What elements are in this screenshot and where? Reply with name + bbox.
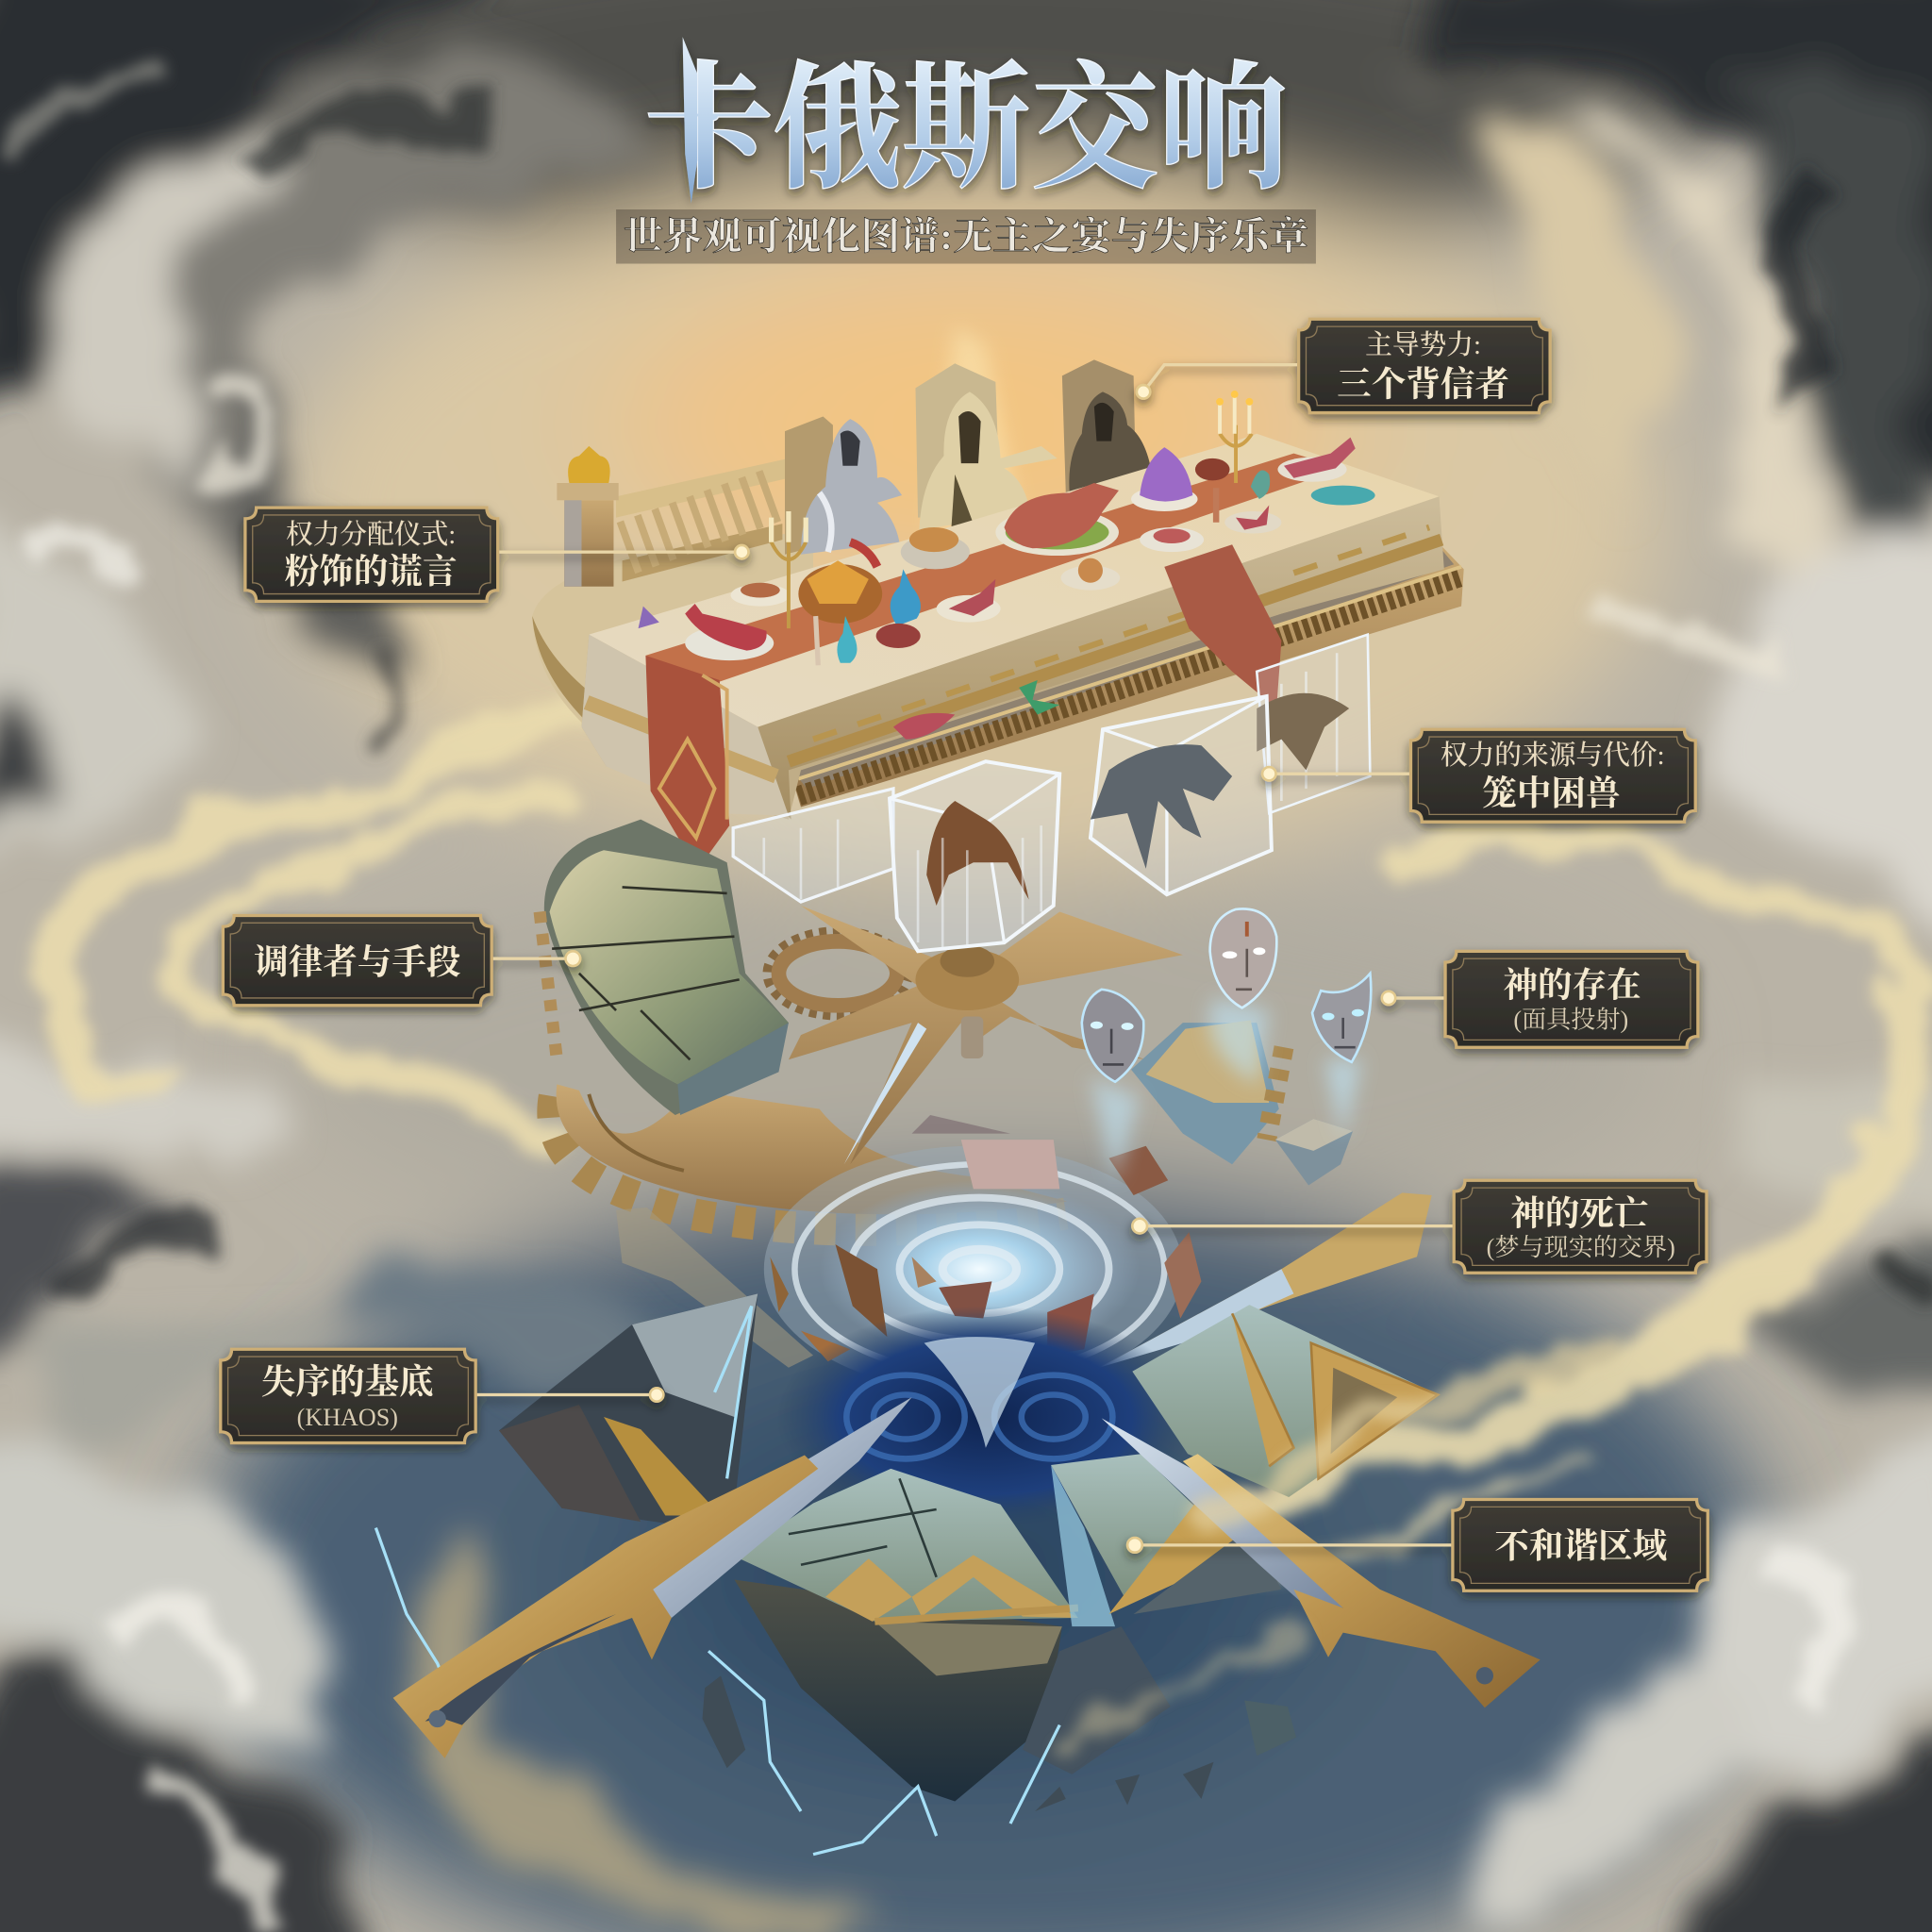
figure: pale hooded traitor [785,416,902,555]
crossed ornate daggers [393,1397,1541,1758]
figure: dark hooded traitor [1062,359,1152,492]
icon: golden crown finial [557,446,619,587]
dish: roast turkey [995,483,1119,556]
callout: caged beasts: 笼中困兽 [1482,774,1621,812]
callout: death of god: 神的死亡 [1510,1193,1649,1232]
callout: dominant powers: 三个背信者 [1337,364,1509,403]
callout: tuner and means [223,915,580,1006]
subtitle band: 世界观可视化图谱:无主之宴与失序乐章 [624,215,1308,258]
decanter blue [891,569,921,626]
callout: death of god [1132,1180,1707,1273]
candelabrum right [1216,391,1253,483]
three traitor figures on thrones [785,326,1152,555]
candelabrum left [772,511,806,628]
figure: golden hooded traitor with light beam [915,326,1058,530]
central cracked stone with gold inlay [734,1469,1078,1622]
orange table runner [645,454,1343,870]
callout: existence of god [1382,951,1698,1047]
left cliff fragment [499,1293,758,1524]
dish: purple crystal [1131,447,1198,511]
cage: far right with brown beast [1257,635,1370,813]
callout: power ritual [245,508,748,601]
callout: base of chaos [221,1349,663,1442]
mask: top [1209,908,1276,1084]
shattered ground: the disharmony zone [375,1293,1438,1855]
feast dishes [639,391,1375,740]
dagger right [1102,1418,1541,1707]
banquet table [581,391,1464,870]
callout: power ritual: 权力分配仪式: [286,520,456,550]
mask: left [1082,990,1143,1183]
callout: death of god: (梦与现实的交界) [1487,1234,1675,1261]
table cloth [581,434,1444,820]
blue abyss whirlpool [776,1306,1195,1528]
golden mist crossing the right stones [1059,1343,1602,1750]
callout: power ritual: 粉饰的谎言 [285,552,458,591]
callout: tuner and means: 调律者与手段 [254,942,460,981]
table wooden base with shelf [789,540,1464,808]
dagger left [393,1397,912,1758]
masks of the gods [1082,908,1371,1183]
rear right stone with gold trim [1132,1305,1438,1497]
title: 卡俄斯交响 [644,54,1288,207]
decanter teal [837,616,857,663]
dream vortex with torn pages [764,1115,1201,1392]
callout: dominant powers: 主导势力: [1365,330,1481,360]
callout: base of chaos: 失序的基底 [261,1362,434,1401]
callout: base of chaos: (KHAOS) [297,1404,398,1431]
cracked stone slab (left) [540,820,789,1115]
clockwork gears and broken stone slab [540,820,1353,1230]
falling rocks [702,1626,1296,1811]
cage: grey beast [1091,696,1272,894]
callout: dominant powers [1137,319,1550,413]
callout: caged beasts: 权力的来源与代价: [1441,741,1665,771]
cage: front with brown bear [890,761,1059,951]
broken stone (right) [1131,1020,1284,1164]
callout: existence of god: (面具投射) [1513,1006,1628,1033]
glass cages with caged beasts [733,635,1370,951]
callout: disharmony zone [1127,1500,1707,1591]
floating terrace with balustrade [532,446,813,758]
dish: right ham [1277,438,1356,482]
ghostly rear daggers [616,1192,1432,1368]
dropped meat and green ribbon [893,680,1059,740]
mask: right [1312,974,1371,1140]
central rock column [734,1579,1062,1802]
dish: pastry basket [798,542,882,624]
star blades and hub [789,906,1183,1164]
callout: existence of god: 神的存在 [1503,966,1641,1005]
big broken gear rim [553,1084,1067,1230]
callout: caged beasts [1262,729,1695,822]
callout: disharmony zone: 不和谐区域 [1494,1526,1668,1565]
golden mist wisps, left and right [56,702,1923,1577]
right cracked stone with gold wedge [1051,1454,1281,1626]
lightning [375,1306,1059,1855]
small floating rock [1275,1119,1353,1185]
small ring gear [769,933,907,1014]
dish: ham [685,604,774,660]
cage: far left [733,789,893,902]
